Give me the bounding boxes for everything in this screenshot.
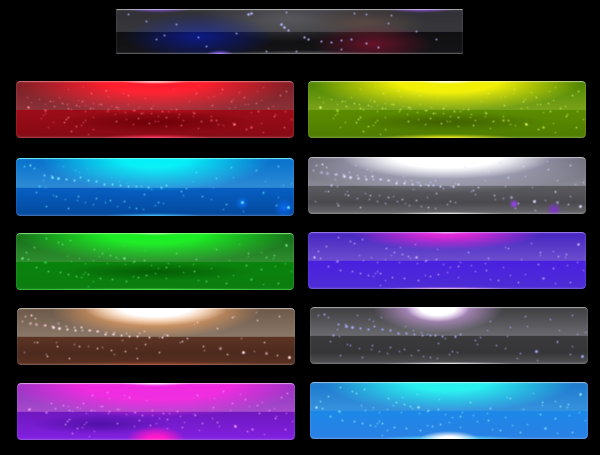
banner: blue xyxy=(16,158,294,216)
glass rim xyxy=(17,308,295,365)
gloss highlight xyxy=(17,383,295,412)
glass rim xyxy=(16,158,294,216)
glass rim xyxy=(308,81,586,138)
star field xyxy=(317,312,587,362)
star field xyxy=(312,160,585,212)
star field xyxy=(314,386,587,437)
glass rim xyxy=(310,307,588,364)
star field xyxy=(318,84,585,136)
banner: bronze xyxy=(17,308,295,365)
star field xyxy=(127,11,438,53)
glass rim xyxy=(310,382,588,439)
gloss highlight xyxy=(16,233,294,262)
gloss highlight xyxy=(116,9,463,32)
banner: violet xyxy=(308,232,586,289)
gloss highlight xyxy=(308,232,586,261)
banner: silver xyxy=(308,157,586,214)
glass rim xyxy=(16,233,294,290)
star field xyxy=(23,164,292,213)
gloss highlight xyxy=(310,382,588,411)
star field xyxy=(28,390,294,438)
glass rim xyxy=(16,81,294,138)
glass rim xyxy=(308,157,586,214)
star field xyxy=(312,236,585,287)
banner: magenta purple xyxy=(17,383,295,440)
glass rim xyxy=(308,232,586,289)
gloss highlight xyxy=(16,158,294,188)
glass rim xyxy=(17,383,295,440)
glass rim xyxy=(116,9,463,54)
gloss highlight xyxy=(16,81,294,110)
gloss highlight xyxy=(310,307,588,336)
gloss highlight xyxy=(308,81,586,110)
star field xyxy=(26,84,293,136)
star field xyxy=(21,312,292,360)
gloss highlight xyxy=(308,157,586,186)
banner: red xyxy=(16,81,294,138)
star field xyxy=(20,237,292,288)
banner: graphite xyxy=(310,307,588,364)
banner: green xyxy=(16,233,294,290)
banner: lime yellow xyxy=(308,81,586,138)
banner: sky blue xyxy=(310,382,588,439)
banner: dark galaxy header xyxy=(116,9,463,54)
gloss highlight xyxy=(17,308,295,337)
